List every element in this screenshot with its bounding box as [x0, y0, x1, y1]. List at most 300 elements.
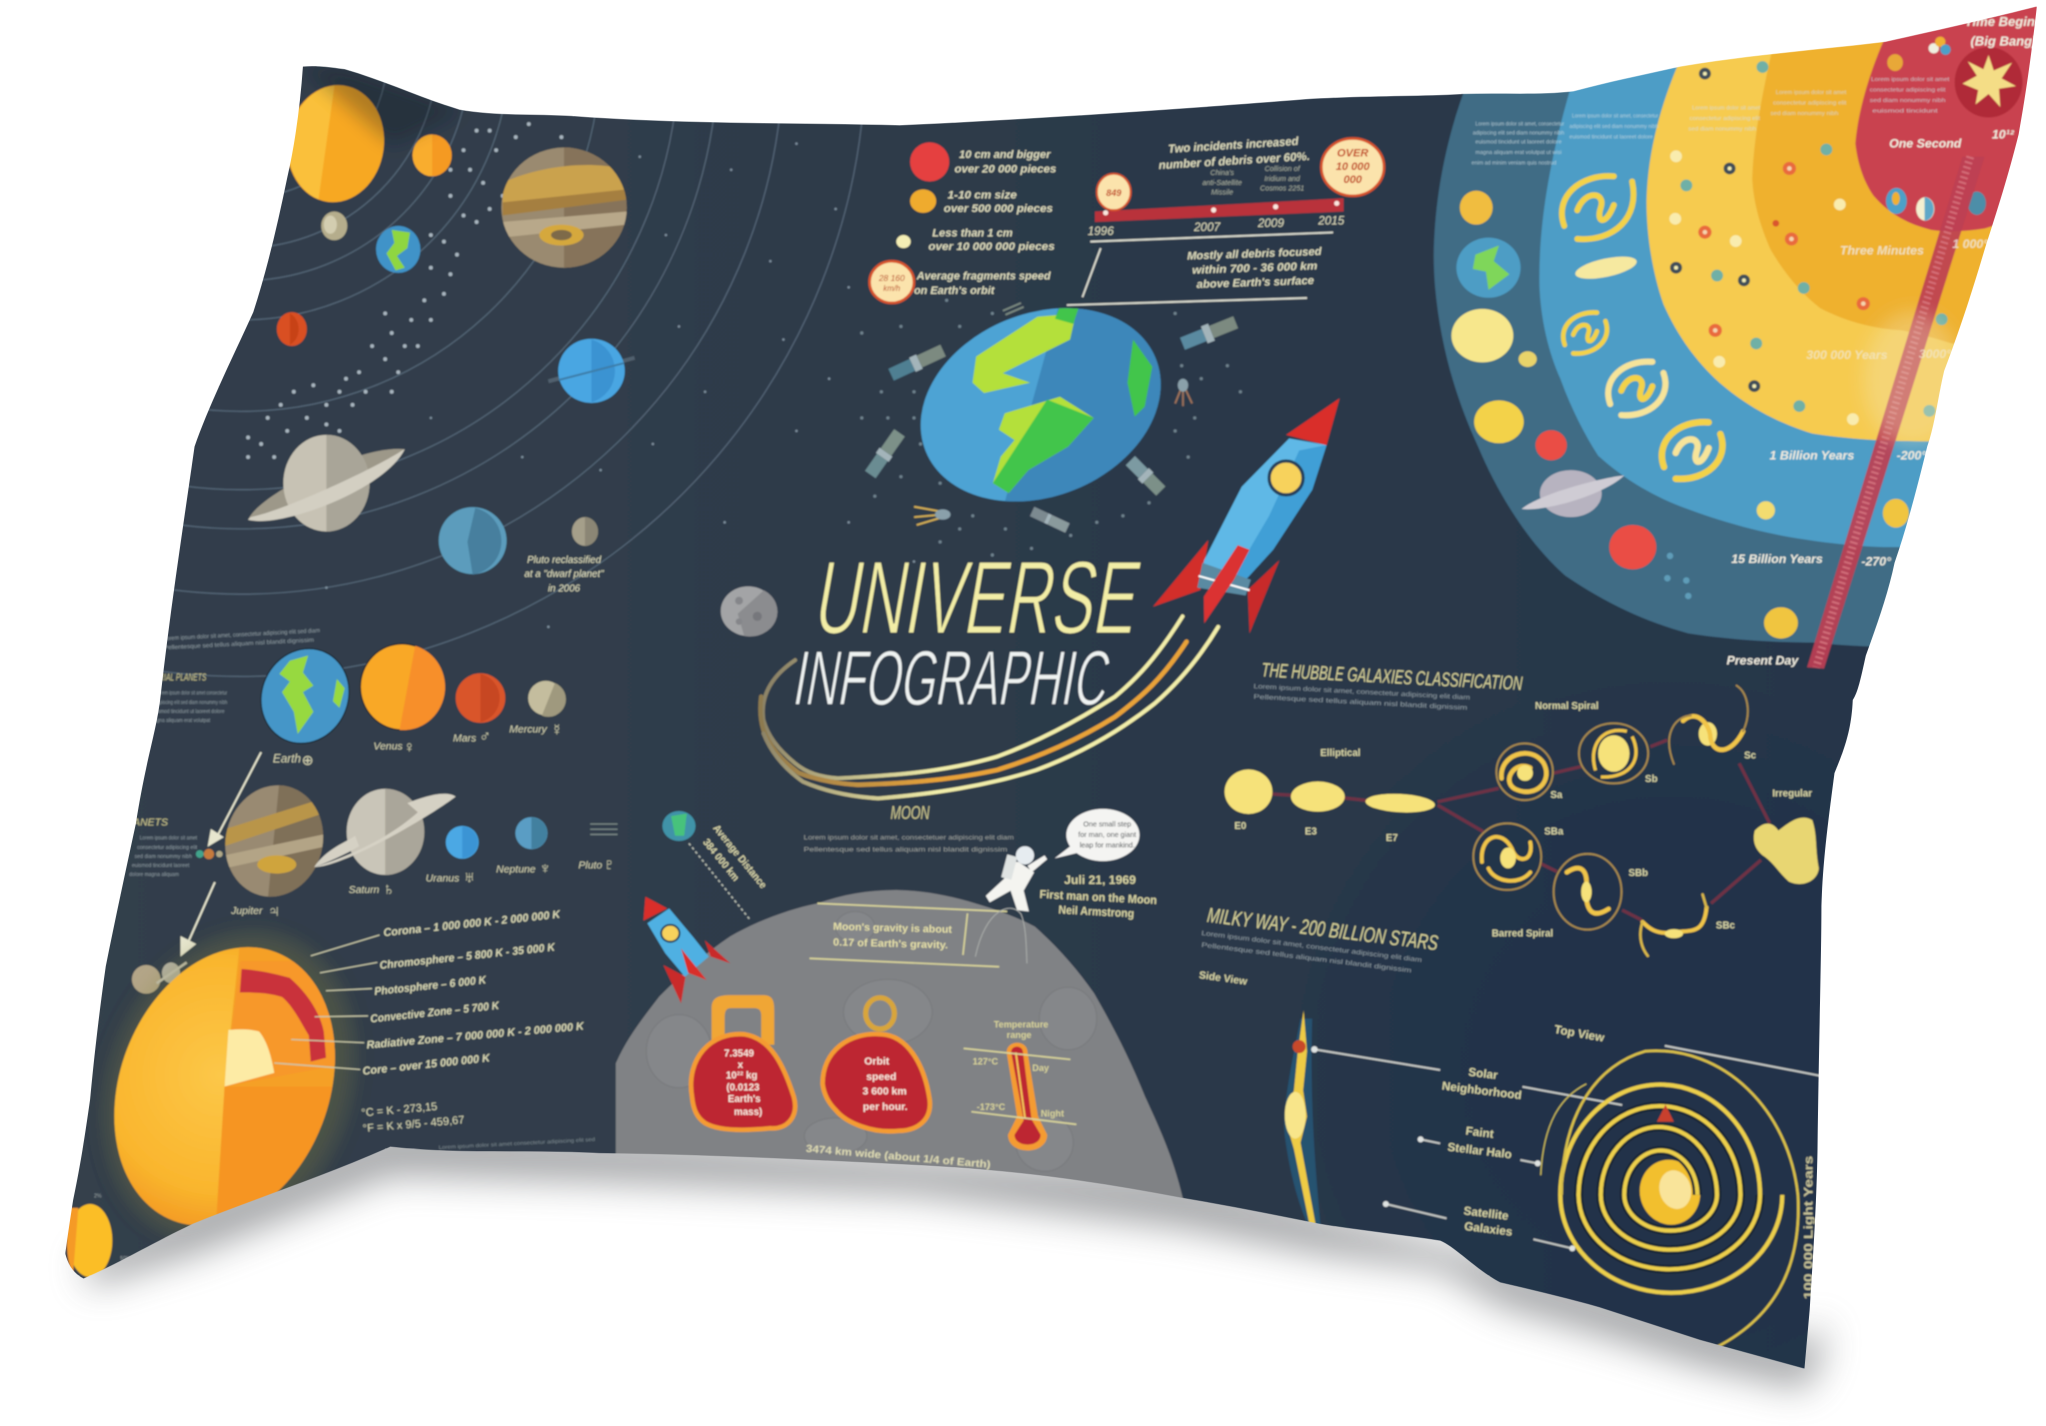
title word: infographic: INFOGRAPHIC	[788, 635, 1117, 722]
elliptical E0	[1225, 770, 1272, 814]
ring descriptions: Lorem ipsum dolor sit amet, consectetur	[1572, 114, 1658, 120]
satellite 5	[1030, 507, 1070, 533]
giant planets	[129, 752, 618, 994]
earth label: Earth	[273, 753, 301, 766]
galaxy SBb	[1554, 854, 1622, 930]
speech bubble: leap for mankind.	[1080, 842, 1135, 850]
sun layer labels: Radiative Zone – 7 000 000 K - 2 000 000 K	[366, 1021, 585, 1052]
kettlebell mass: 10²² kg	[726, 1071, 757, 1082]
sun, top left	[290, 84, 386, 204]
ring descriptions: adipiscing elit sed diam nonummy nibh	[1569, 124, 1658, 130]
satellite galaxies callout	[1383, 1201, 1575, 1251]
incidents heading	[1157, 134, 1310, 172]
galaxy labels: Sa	[1550, 790, 1563, 801]
astronaut	[986, 846, 1047, 911]
galaxy Sb	[1579, 723, 1648, 783]
thermometer: 127°C	[973, 1056, 999, 1066]
venus	[360, 644, 445, 730]
milky way spiral	[1541, 1051, 1798, 1350]
milky way side view	[1284, 1010, 1321, 1234]
debris legend text: over 500 000 pieces	[944, 203, 1053, 215]
armstrong note: Juli 21, 1969	[1064, 874, 1136, 887]
debris legend text: on Earth's orbit	[914, 285, 996, 297]
altitude text	[1187, 246, 1323, 291]
giant description: Lorem ipsum dolor sit amet	[140, 836, 198, 842]
pluto note: Pluto reclassified	[527, 555, 602, 566]
side view label: Side View	[1198, 970, 1249, 988]
galaxy Sa	[1496, 743, 1553, 800]
galaxy labels: SBc	[1716, 920, 1736, 931]
galaxy labels: Normal Spiral	[1535, 701, 1599, 712]
over 10 000 000 circle: 000	[1343, 174, 1363, 186]
era labels: -200°	[1897, 449, 1927, 463]
ring descriptions: euismod tincidunt ut laoreet dolore	[1569, 134, 1653, 140]
galaxy labels: E7	[1386, 833, 1398, 844]
altitude lines	[1067, 232, 1333, 305]
mars label: ♂	[479, 729, 491, 746]
kettlebell mass: mass)	[734, 1107, 762, 1118]
giant description: euismod tincidunt laoreet	[132, 863, 190, 869]
saturn label: ♄	[383, 880, 395, 899]
gravity text	[833, 922, 953, 951]
ring descriptions	[1472, 77, 1950, 167]
galaxy SBc	[1640, 895, 1707, 956]
jupiter label	[230, 902, 280, 921]
timeline years: 2015	[1317, 215, 1345, 228]
sun layer labels: Convective Zone – 5 700 K	[370, 1000, 501, 1025]
era labels: Three Minutes	[1840, 244, 1924, 258]
ring descriptions: Lorem ipsum dolor sit amet	[1776, 90, 1847, 96]
ring descriptions: Lorem ipsum dolor sit amet, consectetur	[1475, 121, 1564, 127]
timeline points	[1106, 203, 1337, 213]
terrestrial intro text: Lorem ipsum dolor sit amet, consectetur adipiscing elit sed diam	[163, 628, 320, 642]
timeline years: 2009	[1257, 217, 1284, 230]
venus label	[373, 739, 415, 756]
era labels: 1 000°	[1952, 237, 1989, 251]
title	[788, 540, 1149, 722]
incident captions: Cosmos 2251	[1260, 185, 1304, 193]
fragment speed circle: 28 160	[878, 273, 905, 283]
satellite 3	[864, 428, 906, 479]
pluto label	[578, 824, 618, 874]
mercury label: ☿	[551, 722, 563, 739]
saturn	[314, 789, 456, 875]
jupiter	[213, 774, 335, 908]
big bang timeline rings	[1434, 0, 2046, 669]
moon craters	[646, 911, 1097, 1171]
distance label: 384 000 km	[700, 837, 741, 884]
terrestrial description: euismod tincidunt ut laoreet dolore	[151, 709, 225, 715]
moon description	[804, 835, 1014, 853]
ring descriptions: consectetur adipiscing elit	[1870, 87, 1946, 93]
kettlebell orbit: 3 600 km	[863, 1086, 907, 1097]
debris field dots	[862, 300, 1240, 555]
mars label: Mars	[453, 734, 476, 745]
moon heading: MOON	[890, 802, 930, 823]
terrestrial intro text	[163, 628, 321, 652]
solar neighborhood callout: Neighborhood	[1441, 1080, 1522, 1102]
ring descriptions: euismod tincidunt	[1872, 108, 1938, 114]
ring five objects	[1886, 37, 1986, 221]
top view callout: Top View	[1553, 1023, 1606, 1045]
stellar halo callout	[1418, 1125, 1541, 1166]
giant description: dolore magna aliquam	[129, 872, 179, 878]
earth from moon	[662, 811, 696, 841]
saturn label: Saturn	[349, 885, 380, 896]
ring descriptions: enim ad minim veniam quis nostrud	[1472, 161, 1556, 167]
temperature formulas: °F = K x 9/5 - 459,67	[362, 1114, 465, 1135]
debris medium circle	[910, 189, 936, 213]
small sun corner	[67, 1193, 131, 1277]
earth	[246, 634, 364, 758]
mercury small	[321, 212, 347, 240]
timeline years	[1088, 215, 1345, 238]
galaxy labels: Barred Spiral	[1492, 928, 1553, 939]
giant heading: ANETS	[132, 817, 168, 828]
sun sphere	[76, 915, 379, 1258]
galaxy labels: Irregular	[1772, 789, 1812, 800]
gravity text: Moon's gravity is about	[833, 922, 953, 936]
uranus label: ♅	[464, 870, 475, 887]
earth small	[376, 226, 420, 273]
venus small	[413, 135, 452, 176]
speech bubble: One small step	[1083, 821, 1131, 829]
mars label	[453, 729, 491, 746]
moon width text: 3474 km wide (about 1/4 of Earth)	[805, 1144, 991, 1171]
era labels: 15 Billion Years	[1731, 552, 1823, 566]
kettlebell mass: Earth's	[728, 1094, 761, 1105]
pluto note	[524, 555, 604, 595]
era labels	[1727, 14, 2042, 668]
ring: galaxies era	[1646, 0, 2046, 441]
incidents heading: Two incidents increased	[1168, 135, 1300, 156]
armstrong note: First man on the Moon	[1039, 888, 1157, 907]
galaxy labels	[1234, 701, 1812, 939]
ring: first stars era	[1752, 0, 2046, 343]
sun layer labels: Core – over 15 000 000 K	[362, 1052, 492, 1078]
kettlebell mass: 7.3549	[724, 1048, 755, 1059]
era labels: 1 Billion Years	[1770, 449, 1854, 463]
debris legend text: over 20 000 pieces	[954, 163, 1056, 175]
venus label: Venus	[373, 742, 403, 753]
sun layer labels	[362, 909, 585, 1078]
mercury	[528, 681, 566, 717]
incident captions: Collision of	[1265, 165, 1301, 173]
hubble heading: THE HUBBLE GALAXIES CLASSIFICATION	[1261, 659, 1524, 695]
distance label: Average Distance	[710, 823, 768, 891]
moon width text	[652, 1144, 1075, 1183]
connecting lines	[1272, 740, 1770, 920]
over 10 000 000 circle: OVER	[1337, 148, 1368, 160]
moon grey	[721, 586, 777, 637]
earth label	[273, 753, 314, 769]
centre fin	[1204, 545, 1250, 623]
pluto note: at a "dwarf planet"	[524, 569, 604, 580]
left fin	[1153, 540, 1208, 607]
mars	[456, 673, 505, 723]
scattered stars	[326, 144, 914, 627]
debris large circle	[910, 142, 949, 182]
neptune label: ♆	[539, 861, 551, 878]
debris legend text: Less than 1 cm	[932, 227, 1013, 239]
galaxy labels: E0	[1234, 821, 1247, 832]
satellite 1	[888, 343, 946, 382]
milky way description	[1201, 930, 1422, 975]
footnote text: Lorem ipsum dolor sit amet consectetur adipiscing elit sed	[438, 1137, 595, 1151]
solar neighborhood callout: Solar	[1468, 1066, 1499, 1082]
ring two spiral galaxies	[1562, 176, 1909, 528]
over 10 000 000 circle: 10 000	[1336, 161, 1370, 173]
over 10 000 000 circle	[1321, 138, 1384, 196]
timeline years: 2007	[1193, 221, 1221, 234]
uranus	[548, 339, 635, 403]
debris legend	[870, 142, 1056, 303]
kettlebell mass: x	[738, 1060, 744, 1071]
terrestrial description: magna aliquam erat volutpat	[150, 718, 211, 724]
neptune label: Neptune	[496, 864, 536, 875]
terrestrial description	[150, 691, 227, 724]
ring descriptions: Lorem ipsum dolor sit amet	[1692, 106, 1760, 112]
small sun corner: 50%	[120, 1256, 131, 1262]
satellite 4	[1125, 455, 1166, 497]
ring three small galaxies	[1675, 67, 1942, 419]
kettlebell orbit: per hour.	[863, 1102, 908, 1113]
terrestrial heading: RIAL PLANETS	[159, 672, 206, 683]
earth label: ⊕	[302, 753, 314, 769]
terrestrial intro text: Pellentesque sed tellus aliquam nisl blandit dignissim	[164, 638, 314, 652]
neptune	[515, 817, 547, 849]
small count circle	[1097, 174, 1131, 210]
title word: universe: UNIVERSE	[807, 540, 1149, 656]
era labels: Time Begins	[1965, 14, 2042, 29]
ring: present era	[1434, 0, 2046, 646]
sun layer labels: Chromosphere – 5 800 K - 35 000 K	[379, 941, 557, 972]
armstrong note	[1039, 874, 1157, 920]
debris small circle	[896, 235, 911, 248]
era labels: 300 000 Years	[1806, 348, 1888, 362]
rocket body	[1198, 438, 1327, 586]
giant description	[129, 836, 198, 878]
light years label: 100 000 Light Years	[1802, 1155, 1815, 1299]
ring descriptions: Lorem ipsum dolor sit amet	[1871, 77, 1950, 83]
galaxy labels: SBb	[1628, 868, 1648, 879]
kettlebell mass: (0.0123	[726, 1082, 760, 1093]
ring descriptions: euismod tincidunt ut laoreet dolore	[1475, 140, 1562, 146]
asteroid belt dots	[248, 124, 561, 457]
jupiter	[501, 144, 627, 274]
giant description: sed diam nonummy nibh	[134, 854, 192, 860]
speech bubble: for man, one giant	[1078, 831, 1136, 839]
hubble description: Lorem ipsum dolor sit amet, consectetur adipiscing elit diam	[1253, 683, 1470, 702]
era labels: One Second	[1889, 137, 1962, 151]
debris legend text: 10 cm and bigger	[959, 149, 1051, 161]
milky way	[1198, 904, 1821, 1350]
uranus	[446, 826, 479, 859]
galaxy labels: E3	[1305, 826, 1317, 837]
sun layer labels: Photosphere – 6 000 K	[374, 974, 488, 998]
speech bubble	[1055, 809, 1139, 861]
big rocket	[1153, 398, 1340, 633]
ring descriptions: consectetur adipiscing elit	[1773, 100, 1847, 106]
galaxy Sc	[1669, 686, 1748, 764]
stellar halo callout: Stellar Halo	[1447, 1141, 1512, 1161]
venus label: ♀	[403, 739, 415, 756]
top view callout	[1553, 1023, 1821, 1076]
time scale strip	[1807, 157, 1985, 669]
debris legend text: 1-10 cm size	[948, 189, 1017, 201]
satellite galaxies callout: Satellite	[1463, 1205, 1510, 1223]
thermometer: Temperature	[994, 1020, 1048, 1030]
era labels: -270°	[1861, 554, 1892, 568]
thermometer: Day	[1032, 1063, 1050, 1073]
fragment speed circle	[870, 261, 914, 303]
debris legend text: over 10 000 000 pieces	[928, 241, 1055, 253]
saturn label	[349, 880, 395, 899]
kettlebell orbit: Orbit	[864, 1056, 890, 1067]
washed-out highlight	[1863, 311, 1962, 447]
arrow to sun	[181, 882, 215, 955]
distance line	[689, 843, 750, 920]
small sun corner: 2%	[94, 1193, 102, 1199]
incident captions: China's	[1210, 169, 1234, 177]
earth with satellites	[864, 274, 1239, 536]
mars small	[277, 312, 307, 346]
incidents heading: number of debris over 60%.	[1158, 150, 1310, 172]
pillow shadow	[84, 1123, 1823, 1389]
nozzle band	[1197, 563, 1251, 595]
pluto	[572, 517, 598, 546]
thermometer: range	[1007, 1030, 1032, 1040]
kettlebell orbit: speed	[866, 1072, 896, 1083]
pluto note: in 2006	[548, 584, 581, 595]
giant description: consectetur adipiscing elit	[137, 845, 198, 851]
era labels: 10¹²	[1992, 127, 2015, 141]
porthole	[1269, 461, 1303, 495]
galaxy labels: Sb	[1645, 774, 1658, 785]
ring: first second	[1855, 0, 2046, 231]
altitude text: within 700 - 36 000 km	[1192, 260, 1318, 277]
kettlebell orbit	[823, 998, 930, 1131]
terrestrial description: Lorem ipsum dolor sit amet consectetur	[157, 691, 227, 697]
sun structure	[61, 895, 595, 1278]
gravity lines	[810, 903, 1027, 967]
incident captions: anti-Satellite	[1202, 179, 1242, 187]
neptune label	[496, 861, 551, 878]
satellite 2	[1179, 314, 1239, 352]
jupiter label: ♃	[268, 902, 280, 921]
fold shading	[303, 67, 460, 144]
ring: stars era	[1539, 0, 2046, 547]
ring descriptions: sed diam nonummy nibh	[1870, 98, 1945, 104]
uranus label: Uranus	[426, 873, 459, 884]
galaxy irregular	[1754, 818, 1819, 884]
milky way description: Pellentesque sed tellus aliquam nisl blandit dignissim	[1201, 942, 1412, 975]
right fin	[1248, 560, 1279, 633]
gravity text: 0.17 of Earth's gravity.	[833, 937, 948, 951]
thermometer: Night	[1041, 1109, 1064, 1119]
kettlebell mass	[691, 995, 795, 1130]
era labels: Present Day	[1727, 654, 1799, 668]
incident captions	[1202, 165, 1304, 197]
milky way description: Lorem ipsum dolor sit amet, consectetur adipiscing elit diam	[1201, 930, 1422, 964]
galaxy labels: Sc	[1744, 751, 1757, 762]
armstrong note: Neil Armstrong	[1058, 903, 1134, 920]
sun glow	[61, 895, 399, 1278]
neptune	[439, 507, 507, 575]
ring descriptions: magna aliquam erat volutpat ut wisi	[1475, 150, 1562, 156]
small count circle: 849	[1106, 188, 1122, 198]
tiny inner planets	[196, 849, 223, 859]
debris timeline	[1067, 134, 1384, 305]
sun layer labels: Corona – 1 000 000 K - 2 000 000 K	[383, 909, 562, 939]
solar system orbits	[164, 82, 863, 678]
incident captions: Iridium and	[1264, 175, 1301, 183]
ring descriptions: adipiscing elit sed diam nonummy nibh	[1473, 131, 1564, 137]
elliptical E3	[1291, 782, 1345, 812]
mercury label: Mercury	[509, 725, 548, 736]
moon description: Pellentesque sed tellus aliquam nisl blandit dignissim	[804, 846, 1007, 853]
moon panel	[616, 802, 1185, 1208]
galaxy labels: Elliptical	[1320, 748, 1361, 759]
temperature formulas: °C = K - 273,15	[361, 1101, 438, 1119]
moon description: Lorem ipsum dolor sit amet, consectetuer adipiscing elit diam	[804, 835, 1014, 842]
thermometer: -173°C	[977, 1102, 1006, 1112]
tiny outer planets	[132, 962, 198, 994]
milky way heading: MILKY WAY - 200 BILLION STARS	[1206, 904, 1439, 955]
nose cone	[1286, 398, 1340, 445]
uranus label	[426, 870, 475, 887]
incident captions: Missile	[1211, 189, 1233, 197]
fragment speed circle: km/h	[883, 284, 900, 293]
hubble description: Pellentesque sed tellus aliquam nisl blandit dignissim	[1253, 694, 1468, 712]
big bang burst	[1955, 47, 2022, 118]
rocket trails	[760, 616, 1218, 798]
ring descriptions: consectetur adipiscing elit	[1690, 116, 1761, 122]
timeline years: 1996	[1088, 225, 1114, 238]
debris legend text: Average fragments speed	[916, 270, 1051, 282]
galaxy SBa	[1473, 823, 1541, 890]
ring one objects	[1451, 191, 1798, 639]
temperature formulas	[361, 1099, 465, 1135]
ring descriptions: sed diam nonummy nibh	[1771, 111, 1838, 117]
earth globe	[891, 274, 1190, 536]
elliptical E7	[1365, 792, 1435, 814]
altitude text: Mostly all debris focused	[1187, 246, 1322, 263]
solar neighborhood callout	[1311, 1046, 1622, 1105]
pluto label: ♇	[603, 857, 615, 874]
era labels: 3000°	[1919, 347, 1952, 361]
stellar halo callout: Faint	[1465, 1125, 1494, 1141]
satellite galaxies callout: Galaxies	[1463, 1220, 1513, 1239]
altitude text: above Earth's surface	[1196, 275, 1314, 291]
arrow earth to asteroids	[209, 752, 261, 845]
terrestrial planets	[150, 628, 566, 769]
saturn	[248, 435, 405, 531]
small rocket	[643, 897, 730, 1003]
terrestrial description: adipiscing elit sed diam nonummy nibh	[154, 700, 227, 706]
era labels: (Big Bang)	[1970, 34, 2036, 49]
hubble classification	[1225, 659, 1819, 956]
mercury label	[509, 722, 563, 739]
pluto label: Pluto	[578, 860, 602, 871]
jupiter label: Jupiter	[230, 906, 263, 917]
galaxy labels: SBa	[1544, 826, 1564, 837]
debris legend text	[914, 149, 1056, 297]
hubble description	[1253, 683, 1470, 712]
thermometer	[964, 1020, 1076, 1150]
sun leader lines	[274, 935, 380, 1070]
timeline bar	[1095, 198, 1344, 222]
